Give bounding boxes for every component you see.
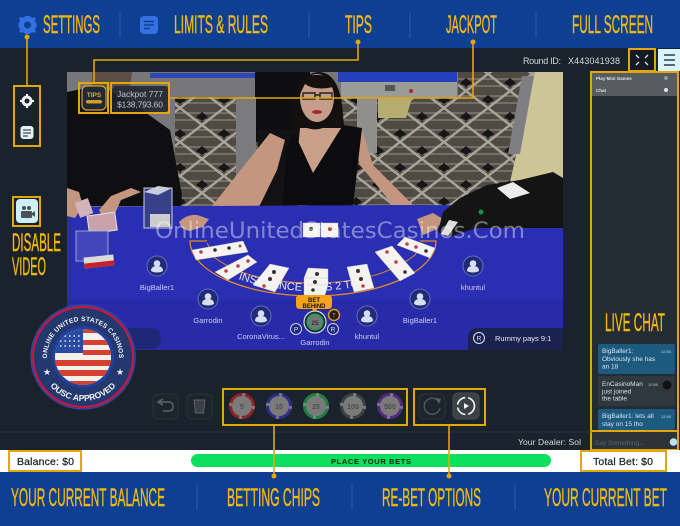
chat panel: Play Mini Games — [596, 76, 632, 81]
dealer — [188, 72, 443, 234]
bet behind seat: R — [331, 326, 336, 334]
bottom band: YOUR CURRENT BALANCE — [11, 484, 165, 512]
top header band: SETTINGS — [43, 11, 100, 39]
watermark: OnlineUnitedStatesCasinos.Com — [155, 219, 525, 244]
balance — [9, 451, 81, 471]
player seats: Garrodin — [300, 338, 330, 347]
place your bets bar — [191, 454, 551, 467]
bottom band: BETTING CHIPS — [227, 484, 320, 512]
rummy pays: R — [477, 336, 482, 342]
hamburger menu — [658, 49, 680, 71]
player seats: Garrodin — [193, 316, 223, 325]
player seats: BigBaller1 — [403, 316, 437, 325]
balance: Balance: $0 — [17, 456, 74, 468]
white status bar — [0, 450, 680, 472]
jackpot readout: $138,793.60 — [117, 100, 163, 110]
chat message 3: 12:50 — [661, 414, 672, 419]
bet behind seat: 25 — [311, 320, 319, 327]
place your bets bar: PLACE YOUR BETS — [331, 457, 411, 466]
chat message 2: just joined — [601, 388, 632, 396]
chat message 2: EnCasinoMan — [602, 381, 643, 388]
chat panel — [591, 72, 678, 431]
bet behind seat: BET — [308, 298, 320, 304]
connector: re-bet options — [446, 425, 452, 478]
chat message 2 — [598, 376, 675, 406]
chat message 2: the table — [602, 396, 627, 402]
betting arc: INSURANCE PAYS 2 TO 1 — [239, 272, 352, 291]
round id: X443041938 — [568, 56, 620, 66]
tips button — [79, 83, 108, 113]
chat message 1: Obviously she has — [602, 356, 656, 363]
chat message 1: BigBaller1: — [602, 348, 634, 355]
dealer name bar: Your Dealer: Sol — [518, 437, 581, 447]
badge: OUSC approved: ONLINE UNITED STATES CASINOS — [42, 316, 124, 358]
bet behind seat: T — [332, 314, 336, 320]
betting chips: 25 — [312, 404, 320, 411]
rummy pays — [468, 328, 563, 350]
total bet: Total Bet: $0 — [593, 456, 653, 468]
total bet — [581, 451, 666, 471]
bet behind seat — [290, 295, 340, 334]
dealer hands — [179, 215, 209, 231]
chat message 3: BigBaller1: lets all — [602, 413, 654, 420]
jackpot readout — [111, 83, 169, 113]
card shoe machine — [438, 172, 563, 237]
text: DISABLE — [12, 229, 61, 257]
chat panel: Chat — [596, 88, 607, 93]
connector: betting chips — [272, 425, 276, 478]
connector: tips — [94, 40, 360, 83]
video panel: live dealer table — [67, 72, 563, 350]
bottom band — [0, 472, 680, 526]
undo and clear buttons — [153, 394, 212, 419]
dealt cards — [192, 223, 435, 295]
bet behind seat: P — [294, 326, 298, 334]
betting chips: 100 — [347, 404, 359, 411]
disable video button — [13, 197, 40, 226]
top header band: LIMITS & RULES — [174, 11, 268, 39]
jackpot readout: Jackpot 777 — [117, 89, 163, 99]
player seats: khuntul — [355, 332, 379, 341]
betting chips: 500 — [384, 404, 396, 411]
tips button: TIPS — [87, 92, 102, 99]
full screen button — [629, 49, 655, 71]
chat input — [591, 431, 678, 450]
betting chips: 5 — [240, 404, 244, 411]
person at left — [67, 85, 182, 206]
chat message 3: stay on 15 tho — [602, 421, 643, 428]
round id — [523, 56, 620, 66]
betting chips — [223, 389, 407, 425]
betting chips: 10 — [275, 404, 283, 411]
left settings buttons — [14, 86, 40, 146]
badge: OUSC approved: ★ — [43, 367, 51, 377]
heading: disable video: VIDEO — [12, 253, 46, 281]
player seats: khuntul — [461, 283, 485, 292]
bottom band: RE-BET OPTIONS — [382, 484, 481, 512]
chat message 1: an 18 — [602, 364, 619, 370]
connector: jackpot — [169, 40, 476, 98]
chat input: Say Something... — [595, 440, 645, 447]
betting arc — [189, 240, 437, 296]
round id: Round ID: — [523, 56, 561, 66]
heading: disable video — [12, 229, 61, 281]
chat message 1: 12:50 — [661, 349, 672, 354]
top header band: JACKPOT — [446, 11, 497, 39]
chat message 3 — [598, 409, 675, 430]
top header band — [0, 0, 680, 48]
badge: OUSC approved: OUSC APPROVED — [51, 383, 115, 402]
player seats: CoronaVirus... — [237, 332, 285, 341]
icon: settings gear — [18, 16, 36, 34]
chat message 1 — [598, 344, 675, 374]
card shoes and boxes on table — [75, 186, 172, 269]
connector: settings — [24, 34, 30, 86]
bet behind seat: BEHIND — [302, 304, 326, 310]
chat message 2: 12:50 — [648, 382, 659, 387]
blue table felt — [67, 205, 563, 350]
re-bet options — [414, 389, 485, 425]
player seats — [140, 256, 485, 347]
player seats: BigBaller1 — [140, 283, 174, 292]
top header band: TIPS — [345, 11, 372, 39]
badge: OUSC approved — [30, 304, 136, 410]
rummy pays: Rummy pays 9:1 — [495, 334, 551, 343]
icon: rules document — [140, 16, 158, 34]
badge: OUSC approved: ★ — [116, 367, 124, 377]
left side bet pill — [67, 328, 161, 349]
